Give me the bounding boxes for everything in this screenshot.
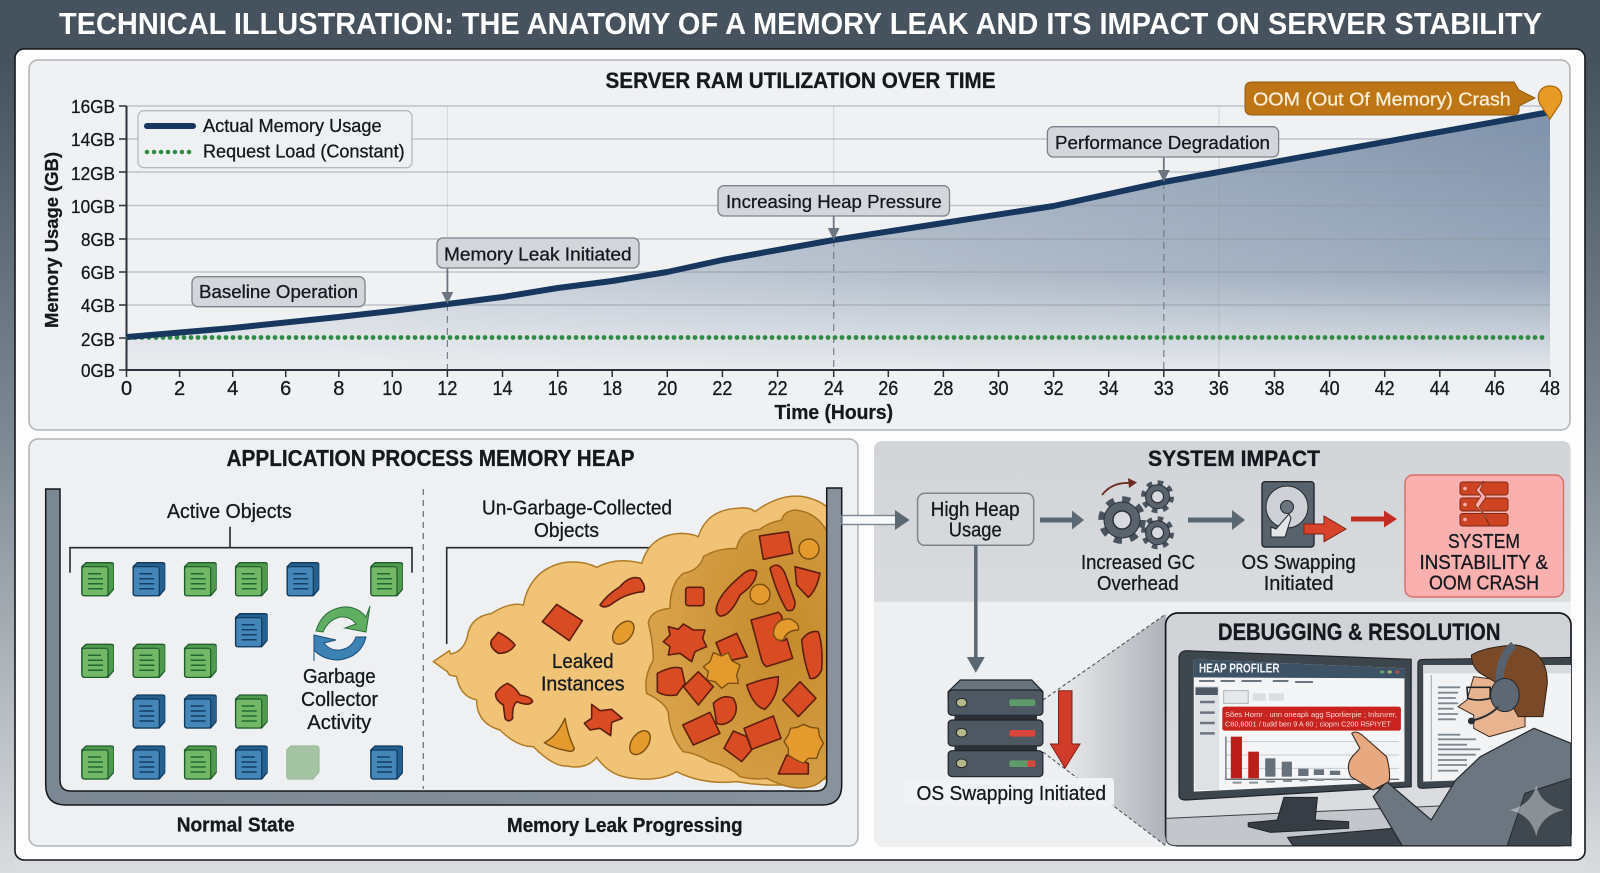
x axis labels: 42 (1375, 378, 1395, 400)
x axis labels: 44 (1430, 378, 1450, 400)
chart title: SERVER RAM UTILIZATION OVER TIME (606, 68, 996, 93)
keyboard (1288, 828, 1427, 846)
active objects label: Active Objects (167, 501, 292, 523)
y axis labels: 10GB (71, 196, 115, 217)
arrow: to system instability (1351, 510, 1397, 528)
headset (1500, 645, 1514, 695)
garbage collector label: Garbage (303, 665, 376, 688)
heap profiler label: HEAP PROFILER (1199, 662, 1280, 676)
actual memory usage line (126, 112, 1550, 337)
x axis labels: 46 (1485, 378, 1505, 400)
leaked instances label (541, 651, 624, 696)
x axis labels: 6 (280, 378, 291, 400)
heap title: APPLICATION PROCESS MEMORY HEAP (226, 445, 634, 471)
divider (422, 489, 424, 789)
increased GC overhead label: Increased GC (1081, 552, 1195, 574)
x axis labels: 16 (548, 378, 568, 400)
arrow: red down (1050, 691, 1080, 768)
un-garbage-collected label (482, 497, 672, 542)
x axis labels: 34 (1099, 378, 1119, 400)
legend: Actual Memory Usage (203, 115, 382, 136)
x axis labels: 32 (1044, 378, 1064, 400)
un-garbage-collected label: Objects (534, 520, 599, 542)
pointing hand (1348, 732, 1390, 790)
leak bracket (447, 548, 650, 644)
active object cubes (82, 563, 403, 779)
x axis labels: 0 (121, 378, 132, 400)
OS swapping initiated caption: OS Swapping Initiated (916, 783, 1106, 805)
watermark star (1509, 785, 1564, 837)
x axis labels: 26 (878, 378, 898, 400)
x axis labels: 48 (1540, 378, 1560, 400)
chair (1507, 778, 1571, 846)
y axis labels: 2GB (81, 329, 115, 350)
x axis labels: 12 (437, 378, 457, 400)
legend (138, 111, 412, 168)
box: system instability and OOM crash: INSTABILITY & (1420, 552, 1549, 574)
error banner text (1225, 710, 1397, 728)
x axis labels: 33 (1154, 378, 1174, 400)
illustration: developer at monitors (1166, 645, 1571, 846)
y axis labels: 0GB (81, 360, 115, 381)
panel: system impact (842, 441, 1571, 847)
error banner text: Sões Homr · unn oneaplı agg Sporlierpie ; Inlsnırer, (1225, 710, 1397, 719)
callout: baseline operation (192, 277, 365, 307)
area under memory curve (126, 112, 1550, 370)
y axis labels: 12GB (71, 163, 115, 184)
main monitor (1179, 651, 1411, 800)
x axis labels: 10 (382, 378, 402, 400)
x axis labels: 24 (824, 378, 844, 400)
callout: OOM crash (1245, 82, 1535, 115)
callout: memory leak initiated: Memory Leak Initiated (444, 244, 632, 265)
leaked instances label: Instances (541, 674, 624, 696)
y axis labels: 16GB (71, 96, 115, 117)
box: high heap usage: Usage (949, 520, 1002, 542)
y axis labels: 14GB (71, 129, 115, 150)
y axis labels: 8GB (81, 229, 115, 250)
title: TECHNICAL ILLUSTRATION: THE ANATOMY OF A MEMORY LEAK AND ITS IMPACT ON SERVER STABILITY (59, 6, 1542, 41)
icon: garbage collector cycle (314, 606, 370, 661)
x axis labels: 36 (1209, 378, 1229, 400)
debugging title: DEBUGGING & RESOLUTION (1218, 619, 1500, 646)
x axis labels: 22 (712, 378, 732, 400)
callout: baseline operation: Baseline Operation (199, 281, 358, 302)
OS swapping initiated label: OS Swapping (1242, 552, 1356, 574)
callout: performance degradation: Performance Degradation (1055, 132, 1270, 153)
increased GC overhead label: Overhead (1097, 573, 1179, 595)
system impact title: SYSTEM IMPACT (1148, 446, 1321, 471)
garbage collector label: Activity (307, 711, 372, 734)
x axis labels (121, 378, 1560, 400)
icon: server stack (948, 680, 1043, 777)
x axis labels: 22 (768, 378, 788, 400)
x axis title: Time (Hours) (774, 401, 893, 424)
icon: hard drive with red arrow (1262, 482, 1346, 547)
axes (119, 106, 1550, 377)
x axis labels: 28 (933, 378, 953, 400)
callout: increasing heap pressure (718, 186, 950, 240)
x axis labels: 20 (657, 378, 677, 400)
icon: crash pin (1538, 86, 1562, 119)
box: system instability and OOM crash: OOM CRASH (1429, 572, 1539, 594)
x axis labels: 8 (333, 378, 344, 400)
active objects bracket (70, 527, 412, 573)
arrow: heap to high heap usage (842, 510, 910, 530)
callout: OOM crash: OOM (Out Of Memory) Crash (1253, 89, 1511, 110)
x axis labels: 4 (227, 378, 238, 400)
desk (1166, 800, 1571, 846)
box: high heap usage: High Heap (931, 499, 1020, 521)
monitor stand (1248, 797, 1349, 832)
normal state caption: Normal State (177, 815, 295, 837)
jacket (1373, 728, 1571, 846)
memory leak progressing caption: Memory Leak Progressing (507, 815, 743, 837)
x axis labels: 30 (988, 378, 1008, 400)
OS swapping initiated label (1242, 552, 1356, 595)
zoom wedge to debugging panel (1043, 614, 1166, 846)
garbage collector label (301, 665, 378, 734)
arrow: high heap down to server (967, 545, 985, 673)
box: system instability and OOM crash: SYSTEM (1448, 531, 1520, 553)
x axis labels: 18 (602, 378, 622, 400)
second monitor (1418, 657, 1571, 788)
x axis labels: 40 (1320, 378, 1340, 400)
grid lines (126, 106, 1550, 370)
error banner text: C60,6001 / tudd ben 9 A 60 ; ciopm C200 R5PIYET (1225, 720, 1391, 728)
panel: application process memory heap (29, 439, 858, 846)
callout: performance degradation (1047, 127, 1279, 182)
increased GC overhead label (1081, 552, 1195, 595)
y axis labels (71, 96, 115, 381)
y axis labels: 4GB (81, 295, 115, 316)
garbage collector label: Collector (301, 688, 378, 711)
callout: memory leak initiated (437, 238, 639, 304)
panel: server RAM utilization chart (29, 60, 1570, 430)
icon: broken server (1460, 481, 1508, 526)
leaked instances label: Leaked (552, 651, 614, 673)
request load dotted line (128, 335, 1547, 340)
un-garbage-collected label: Un-Garbage-Collected (482, 497, 672, 519)
glasses (1467, 687, 1500, 700)
x axis labels: 2 (174, 378, 185, 400)
arrow: to OS swapping (1188, 510, 1245, 530)
box: high heap usage (918, 493, 1034, 545)
y axis labels: 6GB (81, 262, 115, 283)
icon: gears (1102, 478, 1172, 547)
arrow: to GC overhead (1040, 510, 1084, 530)
y axis title: Memory Usage (GB) (42, 152, 62, 328)
x axis labels: 38 (1264, 378, 1284, 400)
OS swapping initiated label: Initiated (1264, 573, 1334, 595)
leak blob with leaked instances (433, 496, 828, 788)
heap container walls (46, 488, 842, 805)
box: system instability and OOM crash (1405, 475, 1564, 597)
hair (1471, 645, 1547, 717)
face (1458, 677, 1525, 737)
legend: Request Load (Constant) (203, 141, 405, 162)
callout: increasing heap pressure: Increasing Heap Pressure (726, 191, 942, 212)
panel: debugging and resolution (1166, 613, 1571, 846)
x axis labels: 14 (492, 378, 512, 400)
